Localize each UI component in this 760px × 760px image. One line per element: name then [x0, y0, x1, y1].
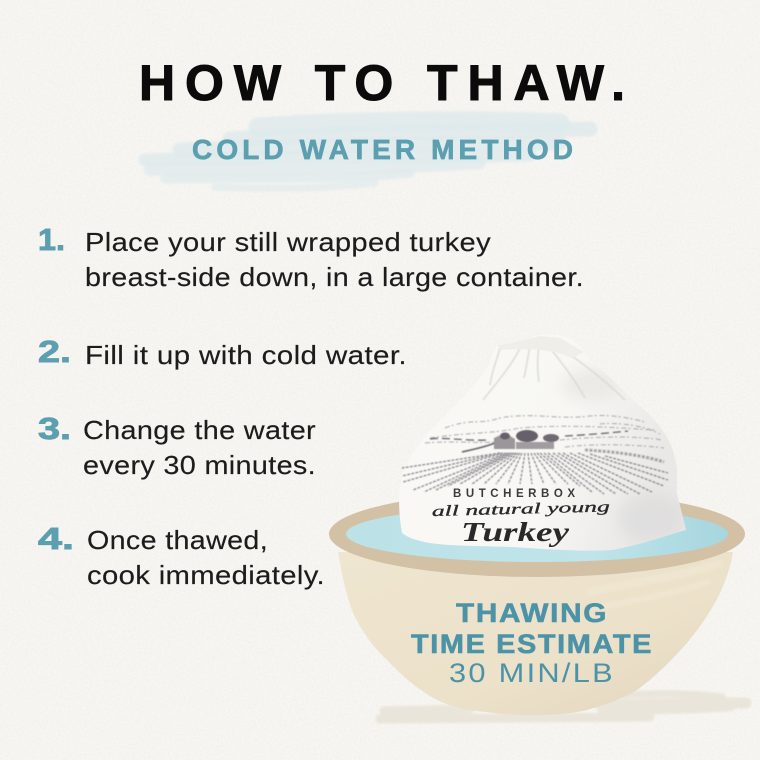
- water: [346, 506, 728, 562]
- field rows: [402, 453, 668, 494]
- thawing time estimate: TIME ESTIMATE: [411, 629, 653, 659]
- bowl brush highlight: [590, 564, 718, 607]
- step 1: 1.: [38, 222, 65, 257]
- bag knot: [497, 336, 584, 358]
- step 4: [38, 521, 325, 590]
- step 4: cook immediately.: [87, 560, 325, 590]
- step 1: Place your still wrapped turkey: [85, 227, 491, 257]
- thawing time estimate: [411, 598, 653, 688]
- horizon dark line: [430, 431, 628, 440]
- brush stroke behind subtitle: [145, 121, 590, 188]
- subtitle: COLD WATER METHOD: [192, 134, 573, 165]
- step 3: every 30 minutes.: [83, 450, 316, 480]
- step 1: breast-side down, in a large container.: [85, 262, 584, 292]
- bag fabric: [399, 335, 686, 551]
- step 3: [38, 411, 316, 480]
- bowl rim: [329, 491, 745, 577]
- step 4: Once thawed,: [87, 525, 268, 555]
- bag label: product name: Turkey: [461, 517, 570, 547]
- bag shading: [483, 336, 686, 542]
- bag label: brand: BUTCHERBOX: [453, 488, 575, 500]
- bowl body: [338, 552, 733, 715]
- bowl: [329, 491, 745, 715]
- thawing time estimate: THAWING: [456, 598, 608, 628]
- hills: [425, 415, 664, 448]
- step 2: [38, 334, 407, 370]
- step 2: Fill it up with cold water.: [85, 340, 407, 370]
- step 4: 4.: [38, 521, 74, 556]
- step 1: [38, 222, 584, 292]
- bowl shadow brush strokes: [380, 694, 746, 719]
- farmhouse and trees: [494, 433, 515, 449]
- step 3: Change the water: [83, 415, 316, 445]
- farm illustration: [402, 415, 668, 494]
- title: HOW TO THAW.: [139, 55, 625, 111]
- thawing time estimate: 30 MIN/LB: [449, 658, 615, 688]
- step 3: 3.: [38, 411, 71, 446]
- step 2: 2.: [38, 334, 71, 369]
- bag label: descriptor: all natural young: [432, 499, 611, 520]
- turkey bag: [399, 335, 686, 551]
